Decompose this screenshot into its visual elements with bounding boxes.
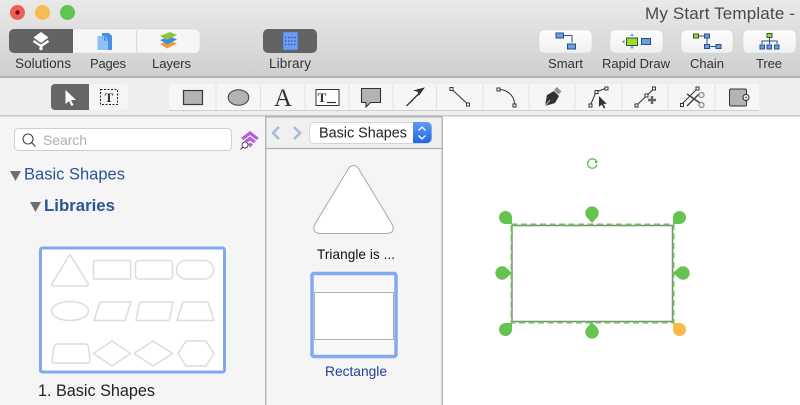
- window title: My Start Template -: [645, 4, 795, 23]
- icon: text box: [316, 90, 339, 106]
- library button: Library: [269, 56, 311, 71]
- icon: text: A: [274, 85, 292, 112]
- selected rectangle: [512, 224, 674, 322]
- icon: scissors: [680, 87, 704, 108]
- drawing toolbar: [0, 78, 800, 116]
- search field: [14, 128, 232, 150]
- library dropdown: [310, 122, 432, 144]
- pointer tools: [51, 84, 128, 110]
- panel: library shapes: [265, 116, 443, 405]
- drawing canvas: [443, 116, 800, 405]
- shape: rectangle selected: [312, 274, 396, 379]
- segmented control: Solutions, Pages, Layers: [9, 29, 200, 71]
- icon: arc: [497, 88, 516, 107]
- library button: [263, 29, 317, 71]
- shape: rectangle selected: Rectangle: [325, 364, 387, 379]
- icon: arrow: [406, 88, 424, 106]
- smart button: [539, 30, 592, 71]
- icon: rotate handle: [588, 159, 598, 168]
- tree item: Basic Shapes: Basic Shapes: [24, 166, 125, 184]
- label: Solutions: Solutions: [15, 56, 71, 71]
- smart button: Smart: [548, 56, 583, 71]
- icon: connection point shape: [730, 89, 749, 106]
- label: Pages: Pages: [90, 56, 126, 71]
- icon: callout: [362, 88, 380, 107]
- navigation arrows: [273, 127, 300, 139]
- window controls: [10, 5, 75, 20]
- selection handles: [495, 206, 690, 339]
- shape tools: [169, 84, 759, 112]
- icon: solution search: [240, 131, 259, 150]
- icon: text box: T: [318, 90, 327, 105]
- panel: solutions browser: [0, 116, 265, 405]
- icon: edit points: [589, 87, 608, 108]
- library name: 1. Basic Shapes: [38, 382, 155, 400]
- icon: pages: [98, 33, 112, 50]
- library thumbnail: [40, 248, 224, 372]
- tree button: [743, 30, 796, 71]
- icon: add point: [635, 87, 656, 107]
- library dropdown: Basic Shapes: [319, 126, 407, 142]
- icon: pen: [545, 87, 562, 106]
- title bar: [0, 0, 800, 78]
- tree item: Libraries: Libraries: [44, 196, 115, 215]
- icon: layers: [160, 32, 177, 48]
- icon: line: [450, 88, 470, 106]
- search field: Search: [43, 132, 87, 148]
- icon: ellipse: [228, 90, 249, 105]
- shape: triangle: [314, 166, 395, 262]
- chain button: [681, 30, 733, 71]
- icon: rectangle: [184, 90, 202, 104]
- rapid draw button: [602, 30, 671, 71]
- chain button: Chain: [690, 56, 724, 71]
- rapid draw button: Rapid Draw: [602, 56, 671, 71]
- pointer tools: T: [105, 90, 114, 105]
- tree button: Tree: [756, 56, 782, 71]
- label: Layers: Layers: [152, 56, 191, 71]
- shape: triangle: Triangle is ...: [317, 247, 395, 262]
- icon: solutions: [34, 32, 48, 50]
